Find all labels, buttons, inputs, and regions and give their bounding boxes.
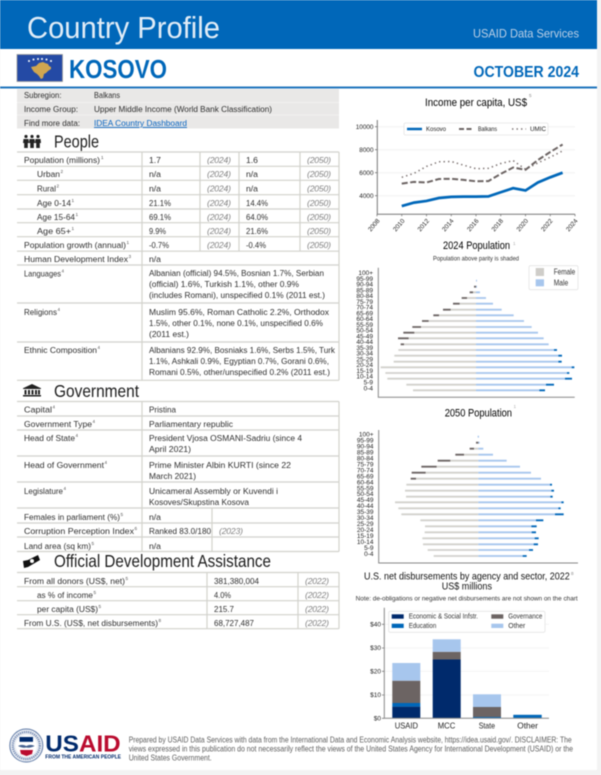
population pyramid: 2024: 95-99 xyxy=(356,276,373,283)
row: head of government: Head of Government xyxy=(24,460,105,470)
row: from all donors: From all donors (US$, net) xyxy=(24,576,125,586)
row: government type: Parliamentary republic xyxy=(149,419,234,429)
row: population: Population (millions) xyxy=(24,155,100,165)
bar: Other xyxy=(513,715,542,718)
population pyramid: 2024: 65-69 xyxy=(356,310,373,317)
row: percent of income xyxy=(37,590,329,600)
heading: U.S. net disbursements chart: 8 xyxy=(571,571,574,576)
heading: 2024 population: 1 xyxy=(513,241,516,246)
row: females in parliament: Females in parliament (%) xyxy=(24,512,120,522)
row: age 65+: 1 xyxy=(72,226,74,231)
heading: income per capita chart: 5 xyxy=(529,93,532,98)
population pyramid: 2050: 5-9 xyxy=(364,545,374,552)
heading: U.S. net disbursements chart: U.S. net disbursements by agency and sector, 2022 xyxy=(364,570,570,582)
note: parity shading: Population above parity is shaded xyxy=(433,256,520,263)
bar chart legend: Governance xyxy=(508,614,542,620)
line chart: income per capita: 2010 xyxy=(392,217,407,233)
row: rural: 2 xyxy=(56,184,60,188)
row: age 15-64: 69.1% xyxy=(149,212,171,222)
row: per capita: per capita (US$) xyxy=(37,604,98,614)
heading: income per capita chart: Income per capita, US$ xyxy=(425,97,527,109)
row: human development index: 3 xyxy=(128,254,132,259)
line chart: income per capita: 2018 xyxy=(491,217,505,233)
bar: MCC xyxy=(433,639,461,718)
panel: country summary: Subregion: xyxy=(24,90,62,100)
line chart: income per capita xyxy=(356,120,580,233)
note: de-obligations: Note: de-obligations or negative net disbursements are not shown on the chart xyxy=(356,596,578,603)
panel: country summary xyxy=(17,89,339,128)
population pyramid: 2024: 35-39 xyxy=(356,345,373,352)
row: age 15-64: Age 15-64 xyxy=(37,212,75,222)
header banner xyxy=(0,0,597,49)
line chart: income per capita: 6000 xyxy=(359,170,374,177)
heading: 2050 population: 1 xyxy=(514,404,516,409)
row: ethnic composition: 1.1%, Ashkali 0.9%, Egyptian 0.7%, Gorani 0.6%, xyxy=(149,356,329,366)
row: legislature: Kosoves/Skupstina Kosova xyxy=(149,497,249,507)
population pyramid: 2050: 75-79 xyxy=(357,461,374,468)
bar chart: disbursements by agency xyxy=(370,608,549,730)
row: land area: Land area (sq km) xyxy=(24,541,91,551)
panel: country summary: Balkans xyxy=(94,90,120,100)
population pyramid: 2024: 85-89 xyxy=(356,287,373,294)
bar: State xyxy=(473,694,501,718)
row: from U.S. xyxy=(24,618,329,628)
row: population: 1 xyxy=(101,155,104,160)
panel: ODA table xyxy=(17,572,339,629)
row: land area: n/a xyxy=(149,541,161,551)
population pyramid: 2050: 90-94 xyxy=(357,444,374,450)
row: percent of income: (2022) xyxy=(305,590,329,600)
row: per capita: 5 xyxy=(98,604,102,609)
row: urban: 2 xyxy=(60,169,64,174)
row: legislature: Legislature xyxy=(24,486,63,496)
population pyramid: 2024: 50-54 xyxy=(356,328,373,334)
icon: government building xyxy=(23,384,41,396)
population pyramid: 2024: 80-84 xyxy=(356,293,373,300)
heading: U.S. net disbursements chart xyxy=(364,570,574,593)
population pyramid: 2050: 80-84 xyxy=(357,455,374,462)
row: from all donors: 5 xyxy=(126,576,128,581)
population pyramid: 2024: 0-4 xyxy=(364,386,373,392)
bar chart legend: Other xyxy=(508,623,526,630)
population pyramid: 2050 xyxy=(357,430,578,563)
row: head of government: March 2021) xyxy=(149,471,196,481)
chart legend: UMIC xyxy=(530,126,546,133)
population pyramid: 2050: 60-64 xyxy=(357,479,374,486)
bar chart: disbursements by agency: State xyxy=(479,720,495,730)
row: rural: (2024) xyxy=(207,184,231,194)
population pyramid: 2024: 10-14 xyxy=(356,374,373,380)
population pyramid: 2050: 85-89 xyxy=(357,449,374,456)
row: head of state: 4 xyxy=(76,433,78,438)
row: religions: (2011 est.) xyxy=(149,329,189,339)
row: age 65+: (2050) xyxy=(307,226,331,236)
row: languages: Albanian (official) 94.5%, Bosnian 1.7%, Serbian xyxy=(149,268,324,278)
row: languages: (official) 1.6%, Turkish 1.1%, other 0.9% xyxy=(149,279,299,289)
line chart: income per capita: 2020 xyxy=(516,217,530,233)
population pyramid: 2024: 75-79 xyxy=(356,299,373,306)
publisher name: USAID Data Services xyxy=(473,26,579,40)
row: languages xyxy=(24,268,325,300)
row: urban xyxy=(37,169,331,179)
row: legislature xyxy=(24,486,278,507)
row: age 15-64 xyxy=(37,212,331,222)
row: age 65+: Age 65+ xyxy=(37,226,71,236)
female bars 2024 xyxy=(381,287,476,390)
population pyramid: 2050: 55-59 xyxy=(357,485,374,492)
chart legend: Balkans xyxy=(478,126,497,133)
row: government type xyxy=(24,419,234,429)
row: languages: 4 xyxy=(62,268,64,274)
row: corruption perception index: (2023) xyxy=(219,526,243,536)
row: urban: (2050) xyxy=(307,169,331,179)
row: age 65+ xyxy=(37,226,331,236)
row: from U.S.: 8 xyxy=(158,618,162,623)
population pyramid: 2050: 0-4 xyxy=(364,551,374,558)
series: Kosovo xyxy=(402,173,563,206)
row: age 65+: 21.6% xyxy=(246,226,268,236)
row: urban: n/a xyxy=(246,169,258,179)
population pyramid: 2024: 100+ xyxy=(358,270,373,277)
pyramid legend: Male xyxy=(554,278,569,288)
row: rural: n/a xyxy=(246,184,258,194)
icon: money xyxy=(23,555,40,568)
row: languages: Languages xyxy=(24,268,61,278)
line chart: income per capita: 2014 xyxy=(441,217,456,233)
male above parity 2024 xyxy=(539,350,574,390)
panel: country summary: Income Group: xyxy=(24,104,78,114)
row: age 0-14: (2024) xyxy=(207,198,231,208)
row: rural xyxy=(37,184,331,194)
row: from all donors xyxy=(24,576,329,586)
row: population growth: (2024) xyxy=(207,240,231,250)
male bars 2050 xyxy=(478,437,561,556)
header rule xyxy=(0,86,597,88)
row: religions: Muslim 95.6%, Roman Catholic 2.2%, Orthodox xyxy=(149,307,330,317)
bar chart legend: Economic & Social Infstr. xyxy=(409,614,478,620)
population pyramid: 2050: 50-54 xyxy=(357,491,374,498)
line chart: income per capita: 10000 xyxy=(356,124,374,131)
row: land area: 5 xyxy=(92,541,94,546)
country name: KOSOVO xyxy=(69,54,167,84)
row: urban: (2024) xyxy=(207,169,231,179)
row: capital: Pristina xyxy=(149,405,176,415)
row: from all donors: 381,380,004 xyxy=(214,576,259,586)
chart legend xyxy=(404,123,548,135)
row: head of state xyxy=(24,433,302,454)
row: age 0-14 xyxy=(37,198,331,208)
line chart: income per capita: 2022 xyxy=(540,217,555,233)
line chart: income per capita: 8000 xyxy=(359,147,374,154)
report date: OCTOBER 2024 xyxy=(474,64,579,81)
row: ethnic composition: Ethnic Composition xyxy=(24,345,97,355)
row: head of state: April 2021) xyxy=(149,444,191,454)
population pyramid: 2050: 65-69 xyxy=(357,473,374,480)
row: percent of income: 4.0% xyxy=(214,590,231,600)
row: from all donors: (2022) xyxy=(305,576,329,586)
row: head of government: 4 xyxy=(104,460,108,465)
population pyramid: 2050: 45-49 xyxy=(357,497,374,504)
row: females in parliament: 5 xyxy=(120,512,124,517)
line chart: income per capita: 2008 xyxy=(367,217,382,233)
row: per capita: 215.7 xyxy=(214,604,234,614)
bar chart: disbursements by agency: $10 xyxy=(370,692,381,699)
row: age 15-64: 64.0% xyxy=(246,212,268,222)
male bars 2024 xyxy=(476,281,572,390)
male above parity 2050 xyxy=(523,485,564,556)
row: population growth: -0.7% xyxy=(149,240,169,250)
row: capital: 4 xyxy=(52,405,56,410)
series: Balkans xyxy=(402,144,563,184)
heading: U.S. net disbursements chart: US$ millions xyxy=(442,581,492,593)
row: females in parliament: n/a xyxy=(149,512,161,522)
line chart: income per capita: 2012 xyxy=(417,217,431,233)
row: corruption perception index xyxy=(24,526,243,536)
bar chart legend: Education xyxy=(409,623,436,630)
row: age 65+: 9.9% xyxy=(149,226,166,236)
pyramid legend: Female xyxy=(554,268,576,276)
population pyramid: 2024: 70-74 xyxy=(356,304,373,312)
population pyramid: 2050: 25-29 xyxy=(357,521,374,528)
row: population: (2050) xyxy=(307,155,331,165)
row: population growth: 1 xyxy=(126,240,130,245)
row: age 0-14: 14.4% xyxy=(246,198,268,208)
panel: people table xyxy=(17,152,339,380)
row: from U.S.: 68,727,487 xyxy=(214,618,254,628)
bar: USAID xyxy=(392,663,420,718)
row: government type: Government Type xyxy=(24,419,92,429)
row: age 0-14: 1 xyxy=(72,198,74,203)
pyramid legend xyxy=(529,266,578,290)
population pyramid: 2024: 55-59 xyxy=(356,322,373,329)
panel: country summary: Upper Middle Income (World Bank Classification) xyxy=(94,104,272,114)
logo: USAID wordmark: USAID xyxy=(45,731,121,757)
row: age 15-64: (2050) xyxy=(307,212,331,222)
female above parity 2050 xyxy=(411,443,479,479)
row: head of state: President Vjosa OSMANI-Sadriu (since 4 xyxy=(149,433,302,443)
row: human development index: Human Development Index xyxy=(24,254,129,264)
population pyramid: 2050: 35-39 xyxy=(357,509,374,516)
heading: Government: Government xyxy=(54,381,139,401)
row: population: 1.6 xyxy=(246,155,258,165)
row: urban: Urban xyxy=(37,169,60,179)
row: rural: n/a xyxy=(149,184,161,194)
female above parity 2024 xyxy=(398,287,476,344)
chart legend: Kosovo xyxy=(426,126,446,133)
row: population: (2024) xyxy=(207,155,231,165)
row: age 15-64: (2024) xyxy=(207,212,231,222)
icon: flag of Kosovo xyxy=(17,54,62,82)
series: UMIC xyxy=(402,151,563,177)
row: from U.S.: From U.S. (US$, net disbursements) xyxy=(24,618,158,628)
bar chart: disbursements by agency: $20 xyxy=(370,668,381,676)
population pyramid: 2050: 70-74 xyxy=(357,467,374,474)
row: capital: Capital xyxy=(24,405,52,415)
row: age 15-64: 1 xyxy=(76,212,78,217)
row: population growth: Population growth (annual) xyxy=(24,240,126,250)
population pyramid: 2050: 95-99 xyxy=(357,438,374,444)
row: religions: Religions xyxy=(24,307,57,317)
row: population growth: -0.4% xyxy=(246,240,266,250)
population pyramid: 2024: 25-29 xyxy=(356,356,373,363)
row: per capita xyxy=(37,604,329,614)
population pyramid: 2050: 30-34 xyxy=(357,515,374,522)
population pyramid: 2024: 90-94 xyxy=(356,282,373,288)
row: religions xyxy=(24,307,330,339)
row: capital xyxy=(24,405,176,415)
population pyramid: 2024: 15-19 xyxy=(356,368,373,375)
row: population xyxy=(24,155,331,165)
population pyramid: 2024: 30-34 xyxy=(356,350,373,358)
population pyramid: 2024: 5-9 xyxy=(364,379,373,386)
population pyramid: 2024: 40-44 xyxy=(356,339,373,346)
row: population growth: (2050) xyxy=(307,240,331,250)
line chart: income per capita: 2024 xyxy=(565,217,580,233)
row: head of government xyxy=(24,460,291,481)
row: percent of income: as % of income xyxy=(37,590,93,600)
footer disclaimer xyxy=(129,736,573,763)
row: per capita: (2022) xyxy=(305,604,329,614)
population pyramid: 2050: 10-14 xyxy=(357,539,374,546)
row: urban: n/a xyxy=(149,169,161,179)
row: age 0-14: (2050) xyxy=(307,198,331,208)
bar chart: disbursements by agency: MCC xyxy=(438,720,455,730)
bar chart: disbursements by agency: $40 xyxy=(370,622,381,628)
population pyramid: 2024: 60-64 xyxy=(356,316,373,323)
population pyramid: 2024 xyxy=(356,266,578,397)
female bars 2050 xyxy=(395,449,478,556)
row: land area xyxy=(24,541,161,551)
row: age 0-14: 21.1% xyxy=(149,198,171,208)
footer disclaimer: United States Government. xyxy=(129,754,212,763)
row: corruption perception index: Ranked 83.0/180 xyxy=(149,526,211,536)
row: ethnic composition xyxy=(24,345,336,377)
heading: 2050 population: 2050 Population xyxy=(445,408,512,420)
row: population: 1.7 xyxy=(149,155,161,165)
row: head of state: Head of State xyxy=(24,433,75,443)
population pyramid: 2050: 15-19 xyxy=(357,533,374,540)
icon: people xyxy=(23,135,41,148)
row: rural: (2050) xyxy=(307,184,331,194)
row: religions: 1.5%, other 0.1%, none 0.1%, unspecified 0.6% xyxy=(149,318,323,328)
row: government type: 4 xyxy=(92,419,96,424)
panel: government table xyxy=(17,402,339,552)
row: legislature: 4 xyxy=(64,486,66,491)
population pyramid: 2024: 20-24 xyxy=(356,362,373,369)
population pyramid: 2050: 20-24 xyxy=(357,527,374,534)
row: human development index: n/a xyxy=(149,254,161,264)
row: age 0-14: Age 0-14 xyxy=(37,198,71,208)
bar chart: disbursements by agency: USAID xyxy=(395,720,418,730)
row: rural: Rural xyxy=(37,184,56,194)
heading: Official Development Assistance: Official Development Assistance xyxy=(54,551,271,571)
heading: 2024 population: 2024 Population xyxy=(443,240,510,252)
row: from U.S.: (2022) xyxy=(305,618,329,628)
title: Country Profile xyxy=(27,10,220,45)
row: population growth xyxy=(24,240,331,250)
row: age 65+: (2024) xyxy=(207,226,231,236)
row: legislature: Unicameral Assembly or Kuvendi i xyxy=(149,486,278,496)
row: corruption perception index: 6 xyxy=(134,526,138,531)
line chart: income per capita: 2016 xyxy=(466,217,481,233)
row: percent of income: 5 xyxy=(94,590,96,595)
row: corruption perception index: Corruption Perception Index xyxy=(24,526,135,536)
line chart: income per capita: 4000 xyxy=(359,193,374,200)
heading: People: People xyxy=(54,132,99,152)
row: ethnic composition: Romani 0.5%, other/unspecified 0.2% (2011 est.) xyxy=(149,367,330,377)
logo: USAID wordmark: FROM THE AMERICAN PEOPLE xyxy=(45,754,122,760)
bar chart: disbursements by agency: Other xyxy=(517,720,538,730)
panel: country summary: Find more data: xyxy=(24,118,80,128)
population pyramid: 2050: 40-44 xyxy=(357,503,374,510)
row: languages: (includes Romani), unspecified 0.1% (2011 est.) xyxy=(149,290,325,300)
row: head of government: Prime Minister Albin KURTI (since 22 xyxy=(149,460,291,470)
row: religions: 4 xyxy=(58,307,60,312)
bar chart: disbursements by agency: $30 xyxy=(370,645,381,652)
bar chart: disbursements by agency: $0 xyxy=(374,716,381,722)
row: ethnic composition: Albanians 92.9%, Bosniaks 1.6%, Serbs 1.5%, Turk xyxy=(149,345,336,355)
population pyramid: 2024: 45-49 xyxy=(356,333,373,340)
bar chart legend xyxy=(389,611,545,632)
panel: country summary: IDEA Country Dashboard xyxy=(94,118,187,128)
population pyramid: 2050: 100+ xyxy=(359,432,374,438)
icon: USAID seal xyxy=(10,729,43,762)
row: ethnic composition: 4 xyxy=(98,345,100,350)
